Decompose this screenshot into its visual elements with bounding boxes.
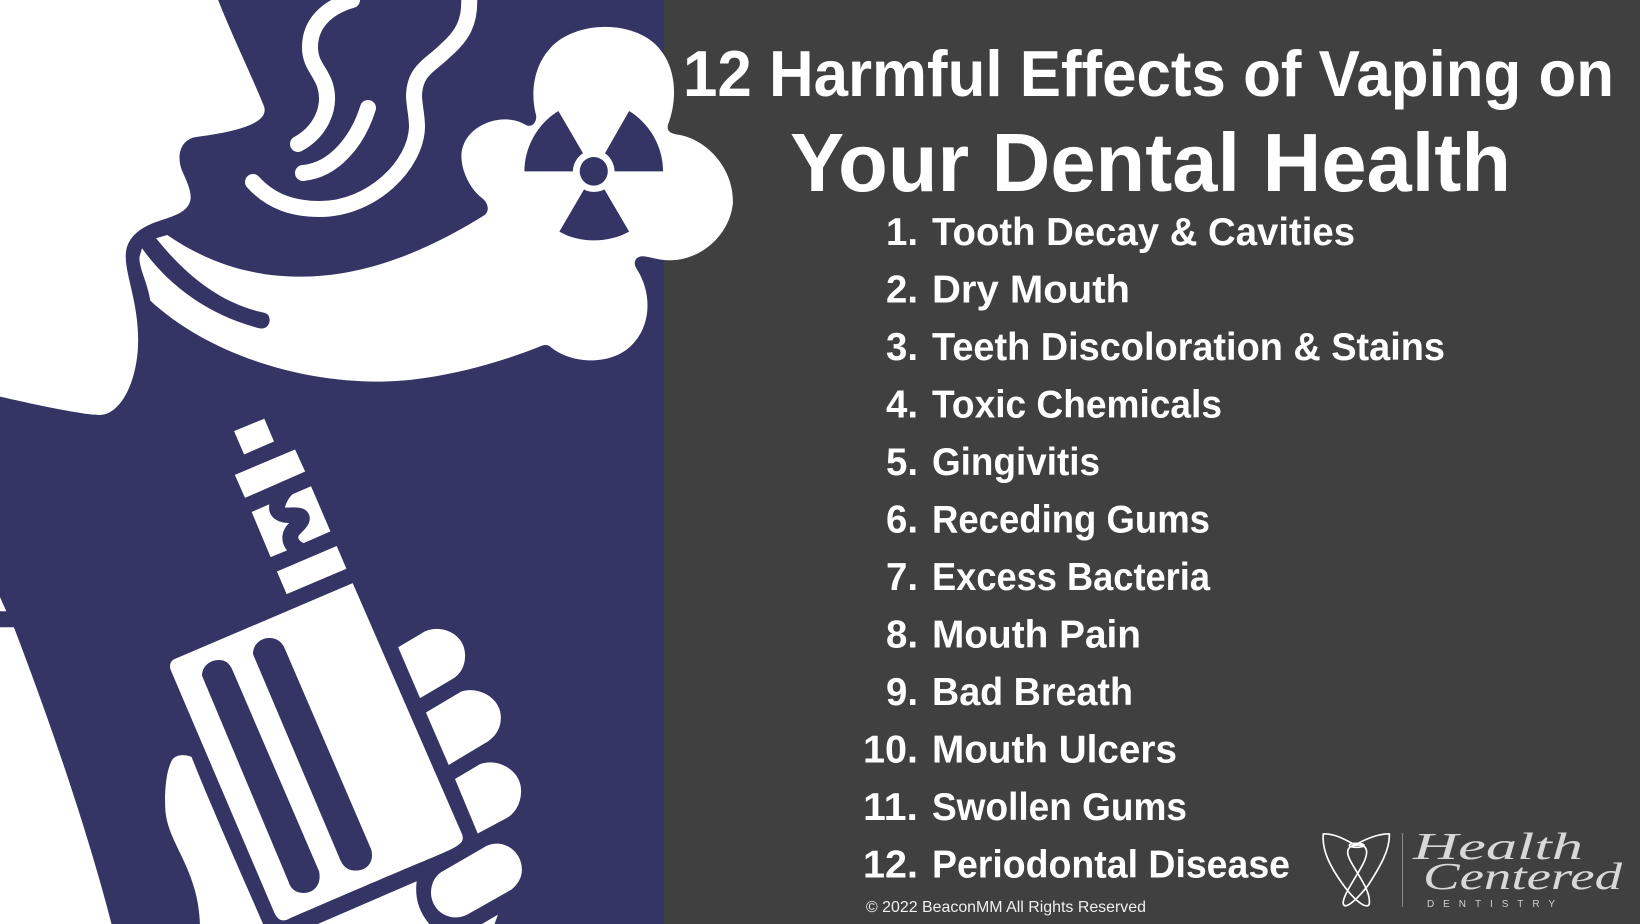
item 10: 10. <box>863 728 918 772</box>
item 5: Gingivitis <box>932 441 1100 484</box>
item 12: 12. <box>863 844 918 886</box>
list of 12 harmful effects <box>863 211 1445 886</box>
item 2: Dry Mouth <box>932 268 1130 312</box>
item 12: Periodontal Disease <box>932 844 1290 886</box>
item 7: 7. <box>886 556 918 599</box>
item 8: Mouth Pain <box>932 614 1141 656</box>
logo: Health Centered Dentistry <box>1323 826 1623 910</box>
item 5: 5. <box>886 441 918 484</box>
item 6: 6. <box>886 498 918 542</box>
logo script wordmark: Health <box>1411 826 1583 868</box>
copyright line: © 2022 BeaconMM All Rights Reserved <box>866 899 1146 916</box>
item 1: Tooth Decay & Cavities <box>932 211 1355 254</box>
item 9: 9. <box>886 671 918 714</box>
panel: navy illustration background <box>0 0 664 924</box>
fingers <box>398 629 522 917</box>
item 10: Mouth Ulcers <box>932 728 1177 772</box>
vapor cloud <box>139 27 733 382</box>
icon: tooth logo mark <box>1323 834 1389 906</box>
title line 1: 12 Harmful Effects of Vaping on <box>683 37 1614 110</box>
item 11: Swollen Gums <box>932 786 1187 829</box>
vape mouthpiece and coil <box>234 419 346 594</box>
icon: radiation symbol <box>524 111 663 240</box>
title <box>683 37 1614 209</box>
smoke wisps <box>253 0 469 209</box>
thumb and palm <box>165 755 498 924</box>
item 3: Teeth Discoloration & Stains <box>932 326 1445 369</box>
item 1: 1. <box>886 211 918 254</box>
illustration: hand holding vape device <box>0 419 522 924</box>
logo script wordmark: Centered <box>1423 856 1623 898</box>
title line 2: Your Dental Health <box>790 116 1511 209</box>
item 7: Excess Bacteria <box>932 556 1210 599</box>
arm <box>0 597 112 924</box>
item 11: 11. <box>863 786 918 829</box>
item 9: Bad Breath <box>932 671 1133 714</box>
item 2: 2. <box>886 268 918 312</box>
item 3: 3. <box>886 326 918 369</box>
item 4: 4. <box>886 384 918 426</box>
logo subtitle: DENTISTRY <box>1427 899 1555 910</box>
item 4: Toxic Chemicals <box>932 384 1222 426</box>
vape body with slots <box>170 583 463 920</box>
illustration: face, vapor cloud and radiation symbol <box>0 0 733 415</box>
item 8: 8. <box>886 614 918 656</box>
face silhouette <box>0 0 265 415</box>
item 6: Receding Gums <box>932 498 1210 542</box>
logo script wordmark <box>1411 826 1623 898</box>
logo divider <box>1402 833 1403 907</box>
